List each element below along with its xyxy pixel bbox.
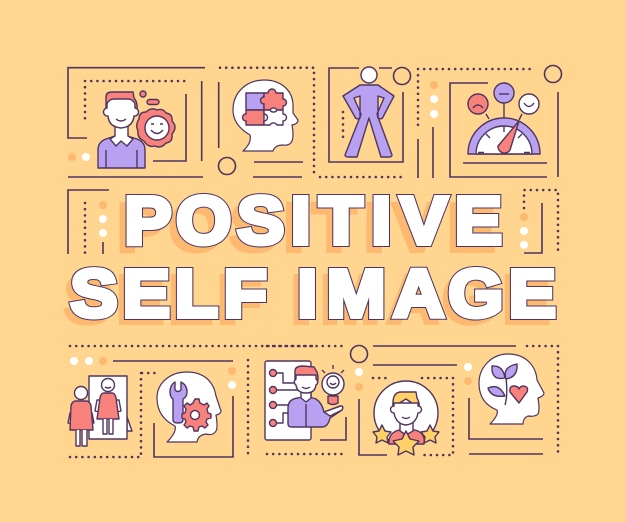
title: POSITIVE SELF IMAGE: SELF IMAGE <box>70 256 556 331</box>
icon: woman at mirror <box>68 376 132 446</box>
icon: mood gauge with faces <box>468 83 540 154</box>
icon: head with wrench and gear <box>157 372 221 442</box>
icon: confident person, hands on hips <box>343 67 394 157</box>
title: shadow layer: SELF IMAGE <box>64 262 550 337</box>
title: POSITIVE SELF IMAGE <box>70 183 556 331</box>
icon: man with circuit board and light bulb <box>265 361 344 440</box>
icon: head with leaves and heart <box>479 354 544 424</box>
title: POSITIVE SELF IMAGE: POSITIVE <box>125 183 502 258</box>
icon: head with puzzle <box>233 80 298 151</box>
icon: man with three stars <box>373 381 439 455</box>
title: POSITIVE SELF IMAGE: SELF IMAGE <box>70 256 556 331</box>
title: shadow layer <box>64 190 550 337</box>
title: POSITIVE SELF IMAGE: POSITIVE <box>125 183 502 258</box>
icon: man with smiling gear <box>98 91 175 168</box>
title: shadow layer: POSITIVE <box>118 190 495 265</box>
